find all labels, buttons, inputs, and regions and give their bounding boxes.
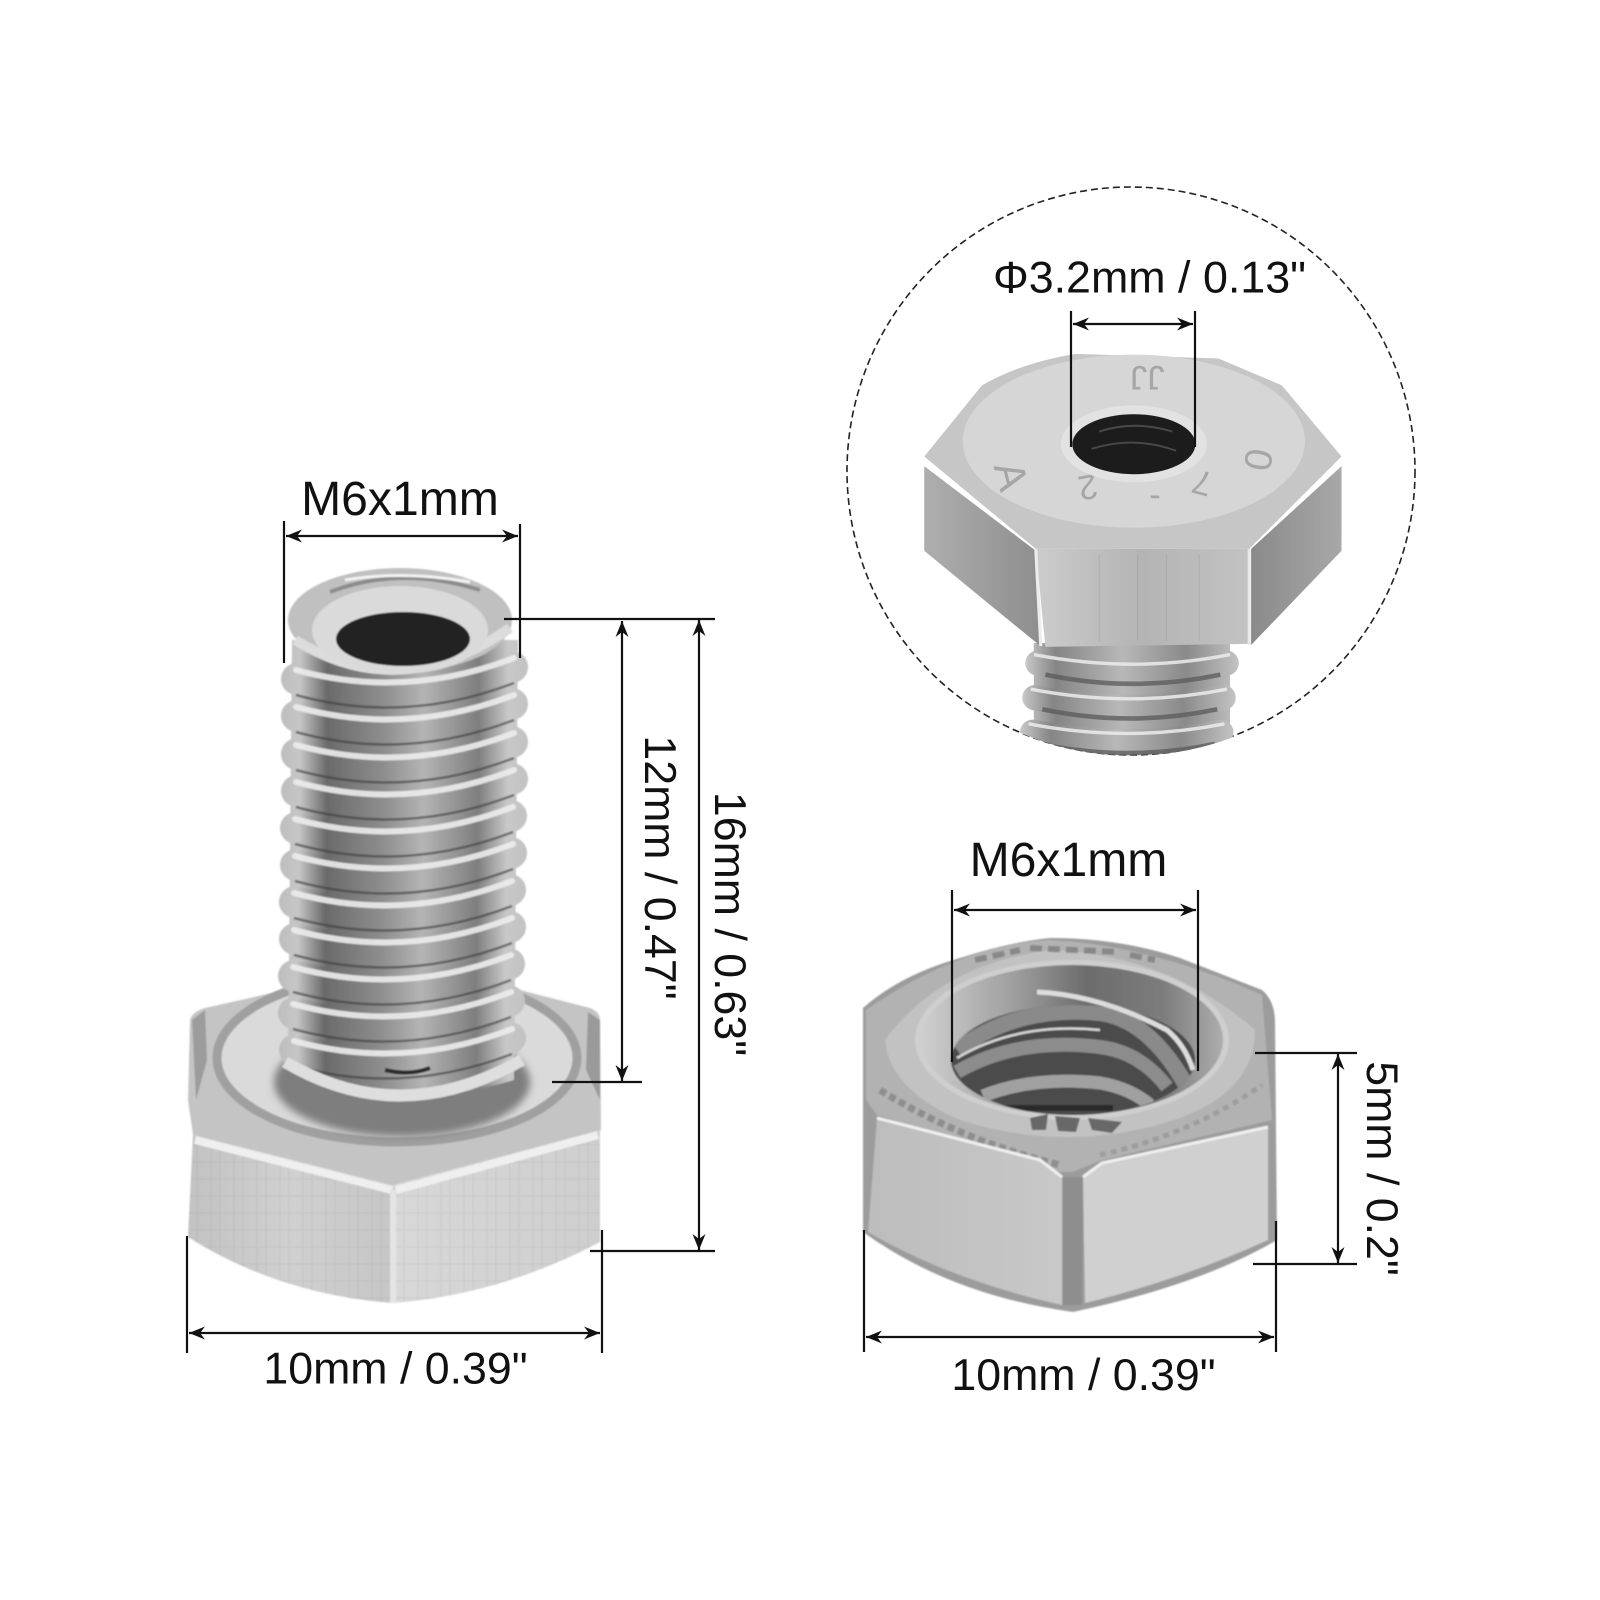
shaft foot collar [285, 1060, 522, 1096]
dimension: bolt thread M6x1mm: M6x1mm [301, 472, 499, 526]
panel: hex bolt side view [188, 568, 601, 1303]
embossed marks [985, 358, 1281, 517]
threaded hole [915, 960, 1229, 1120]
dimension: bolt head width 10mm: 10mm / 0.39" [263, 1344, 528, 1393]
photo: bolt head top view [924, 354, 1342, 753]
stamped marks [1030, 1114, 1122, 1133]
embossed marks: 0 [1235, 445, 1281, 474]
center bore [1061, 405, 1207, 482]
nut top chamfer [866, 940, 1272, 1172]
nut outline [863, 938, 1277, 1312]
threads below head [1028, 643, 1230, 753]
bolt head top face [188, 990, 601, 1185]
embossed marks: JJ [1130, 358, 1165, 396]
embossed marks: 7 [1188, 461, 1217, 503]
embossed marks: A [985, 456, 1038, 496]
panel: dashed circle detail of bolt head top [847, 187, 1415, 755]
shaft end with bore [288, 568, 512, 672]
dimension: total length 16mm: 16mm / 0.63" [705, 792, 754, 1056]
dashed circle outline [847, 187, 1415, 755]
dimension: nut width 10mm: 10mm / 0.39" [951, 1351, 1216, 1400]
embossed marks: - [1149, 479, 1161, 517]
dimension: nut thread M6x1mm: M6x1mm [970, 833, 1167, 887]
dimension: bore diameter 3.2mm: Φ3.2mm / 0.13" [993, 253, 1306, 303]
photo: threaded hollow bolt [188, 568, 601, 1303]
bolt head side faces [188, 1135, 393, 1303]
embossed marks: 2 [1075, 466, 1101, 507]
dimension: thread length 12mm: 12mm / 0.47" [635, 735, 684, 1000]
head top face [924, 354, 1342, 549]
photo: hex nut [863, 938, 1277, 1312]
threaded shaft [288, 640, 518, 1095]
panel: hex nut [863, 833, 1406, 1400]
nut side faces [868, 1118, 1062, 1305]
dimension: nut thickness 5mm: 5mm / 0.2" [1357, 1061, 1406, 1276]
head side faces [924, 466, 1041, 646]
